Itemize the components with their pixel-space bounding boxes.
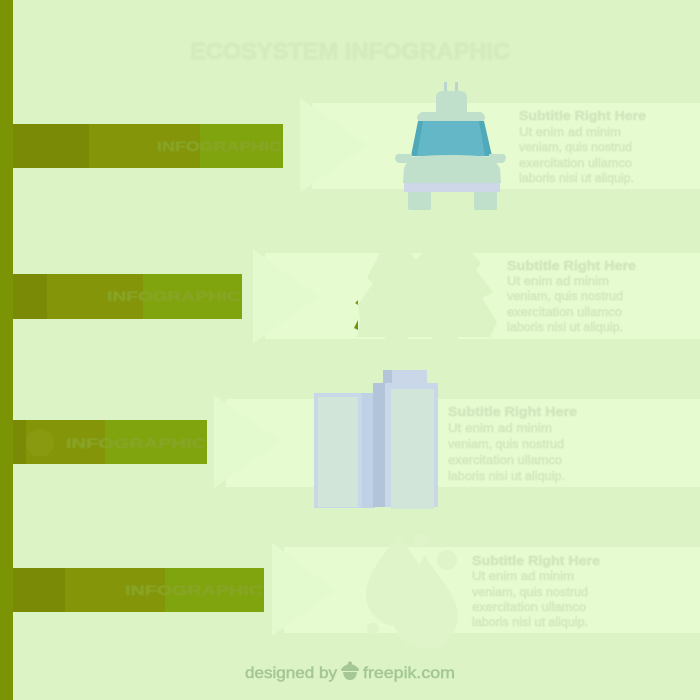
green bar: INFOGRAPHIC (157, 138, 282, 154)
panel: row 2 trees (13, 222, 700, 362)
panel: row 3 buildings (13, 370, 700, 509)
text block (519, 108, 646, 185)
text block: exercitation ullamco (472, 602, 586, 614)
text block: Subtitle Right Here (472, 553, 600, 568)
green bar: INFOGRAPHIC (66, 435, 206, 451)
text block: exercitation ullamco (448, 455, 562, 467)
text block: Ut enim ad minim (519, 127, 621, 139)
footer credit: designed by (245, 665, 337, 682)
icon: buildings (314, 370, 438, 509)
light strip (226, 399, 700, 487)
green bar (13, 420, 207, 464)
icon: water drops (366, 533, 458, 649)
light strip (265, 253, 700, 339)
light strip (284, 547, 700, 633)
text block: Ut enim ad minim (448, 423, 552, 435)
green bar (13, 568, 264, 612)
text block: laboris nisi ut aliquip. (519, 173, 634, 185)
panel: row 4 water (13, 533, 700, 649)
light strip (312, 103, 700, 189)
icon: trees (357, 222, 497, 362)
text block: Subtitle Right Here (519, 108, 646, 123)
icon: freepik logo (341, 662, 359, 680)
text block (507, 258, 636, 334)
text block: exercitation ullamco (519, 158, 632, 170)
text block: Ut enim ad minim (472, 571, 574, 583)
panel: row 1 car (13, 82, 700, 210)
icon: small dark tree tips (354, 300, 358, 330)
text block: veniam, quis nostrud (472, 587, 588, 599)
green bar (13, 274, 242, 319)
text block: veniam, quis nostrud (519, 142, 632, 154)
text block: exercitation ullamco (507, 307, 622, 319)
footer credit: freepik.com (363, 665, 455, 682)
green bar (13, 124, 283, 168)
text block: Subtitle Right Here (507, 258, 636, 273)
text block (472, 553, 600, 629)
arrow head (253, 249, 318, 344)
green bar: INFOGRAPHIC (125, 582, 263, 598)
arrow head (300, 98, 367, 193)
title: ECOSYSTEM INFOGRAPHIC (190, 38, 510, 64)
text block: laboris nisi ut aliquip. (448, 471, 565, 483)
text block: veniam, quis nostrud (507, 291, 623, 303)
text block: veniam, quis nostrud (448, 439, 564, 451)
text block: laboris nisi ut aliquip. (507, 322, 623, 334)
icon: car (395, 82, 506, 210)
text block: Ut enim ad minim (507, 276, 609, 288)
text block: laboris nisi ut aliquip. (472, 617, 588, 629)
footer credit (245, 662, 455, 682)
arrow head (272, 543, 336, 636)
text block (448, 404, 577, 483)
arrow head (214, 395, 280, 488)
vertical spine (0, 0, 13, 700)
text block: Subtitle Right Here (448, 404, 577, 419)
green bar: INFOGRAPHIC (107, 288, 241, 304)
